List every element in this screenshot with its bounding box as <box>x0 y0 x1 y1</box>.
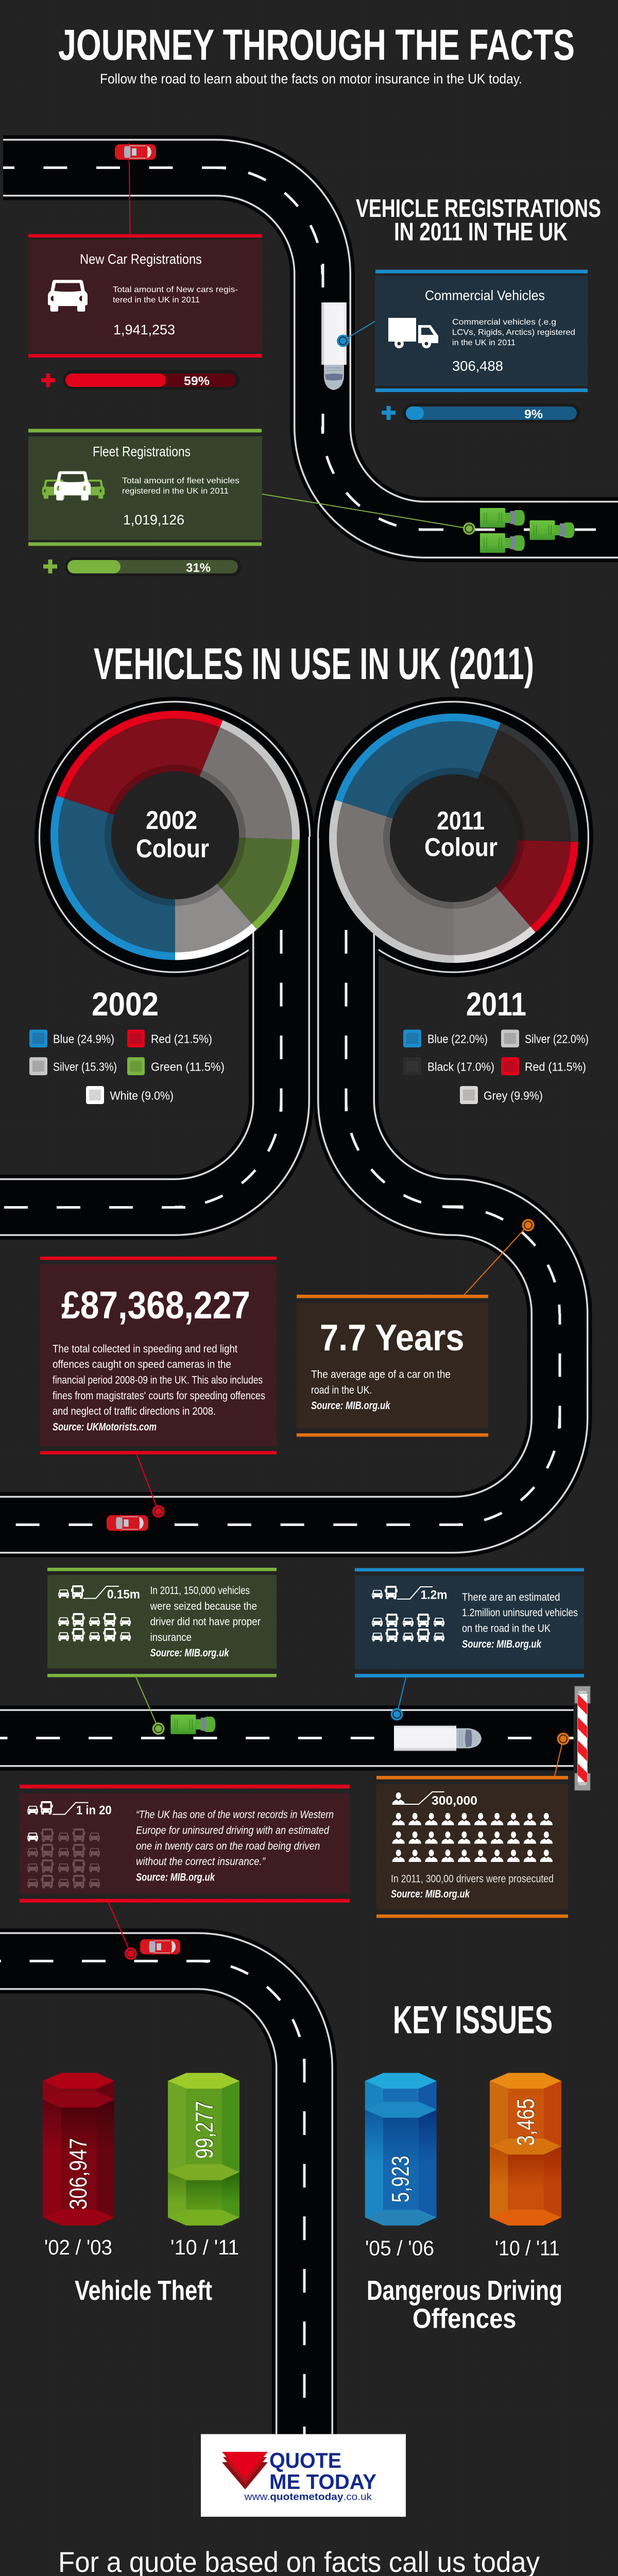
description: tered in the UK in 2011 <box>113 296 200 304</box>
icon: car <box>48 280 88 312</box>
label: 2011 colour: Colour <box>424 833 497 861</box>
subtitle: Follow the road to learn about the facts on motor insurance in the UK today. <box>100 71 522 87</box>
value: 99,277 <box>191 2101 218 2159</box>
source: Source: UKMotorists.com <box>53 1421 157 1433</box>
source: Source: MIB.org.uk <box>391 1888 470 1900</box>
marker: 7.7 years <box>522 1219 535 1231</box>
legend: 2002: Green (11.5%) <box>151 1060 225 1074</box>
icon: person header and value <box>392 1792 477 1808</box>
label: 2011 colour <box>424 806 497 861</box>
description: on the road in the UK <box>462 1623 551 1635</box>
quote <box>136 1809 334 1868</box>
value: 5,923 <box>387 2156 414 2202</box>
icon: white truck <box>394 1726 482 1751</box>
legend: 2002 <box>29 1029 225 1104</box>
quote: Europe for uninsured driving with an estimated <box>136 1825 330 1837</box>
road: circular discs <box>35 697 593 977</box>
marker: one in twenty <box>125 1947 137 1960</box>
description: road in the UK. <box>311 1384 372 1396</box>
description: financial period 2008-09 in the UK. This also includes <box>53 1374 263 1386</box>
source: Source: MIB.org.uk <box>311 1400 391 1412</box>
description: registered in the UK in 2011 <box>122 487 229 496</box>
icon: vehicle header and value <box>27 1801 112 1818</box>
heading: fleet registrations: Fleet Registrations <box>93 444 191 460</box>
pictogram: one in twenty vehicles <box>27 1828 100 1888</box>
logo text <box>244 2448 376 2503</box>
connector: new car registrations <box>129 161 130 234</box>
connector: drivers prosecuted <box>555 1739 563 1776</box>
heading: commercial vehicles: Commercial Vehicles <box>425 287 545 303</box>
heading: new car registrations: New Car Registrations <box>80 251 202 267</box>
connector: 7.7 years <box>465 1225 528 1295</box>
panel: uninsured vehicles <box>355 1568 584 1677</box>
progress bar: 59%: 59% <box>184 374 210 388</box>
panel: average car age <box>297 1295 488 1437</box>
logo: quote me today <box>201 2434 406 2517</box>
marker: commercial vehicles <box>337 335 349 347</box>
description: The total collected in speeding and red light <box>53 1343 237 1355</box>
connector: one in twenty <box>108 1903 131 1954</box>
pictogram: vehicles <box>58 1613 131 1641</box>
description: LCVs, Rigids, Arctics) registered <box>452 328 575 337</box>
description <box>53 1343 265 1417</box>
value: 1,941,253 <box>113 322 175 337</box>
progress bar: 31%: 31% <box>186 561 211 575</box>
icon: person header and value: 300,000 <box>432 1794 477 1808</box>
description <box>311 1369 451 1396</box>
legend: 2011 <box>403 1029 589 1104</box>
legend: 2002: Silver (15.3%) <box>53 1060 117 1074</box>
description: fines from magistrates' courts for speeding offences <box>53 1390 265 1402</box>
chart: 2011 colour donut <box>283 668 618 1009</box>
marker: speeding fines <box>152 1505 165 1518</box>
description: were seized because the <box>150 1600 257 1613</box>
value: 306,947 <box>64 2138 92 2210</box>
description <box>122 477 239 496</box>
heading: vehicle registrations <box>356 195 601 246</box>
description: and neglect of traffic directions in 2008. <box>53 1405 216 1417</box>
marker: uninsured vehicles <box>391 1708 403 1721</box>
road: left branch <box>0 837 281 1208</box>
marker: drivers prosecuted <box>557 1733 570 1745</box>
source: Source: MIB.org.uk <box>136 1871 215 1884</box>
icon: vehicle header and value: 1 in 20 <box>76 1804 112 1818</box>
value: 3,465 <box>512 2098 539 2146</box>
bar: dangerous driving 05/06 <box>365 2073 437 2226</box>
description: The average age of a car on the <box>311 1369 451 1381</box>
icon: vehicle header and value <box>372 1586 448 1602</box>
icon: white truck on road <box>321 302 347 390</box>
pictogram: people <box>392 1813 553 1862</box>
description: Total amount of New cars regis- <box>113 285 238 294</box>
description: 1.2million uninsured vehicles <box>462 1607 578 1619</box>
legend: 2002: Red (21.5%) <box>151 1032 212 1046</box>
quote: one in twenty cars on the road being driven <box>136 1840 320 1852</box>
label: 2002 colour: 2002 <box>146 806 197 835</box>
bar labels: years: '05 / '06 <box>365 2236 434 2260</box>
connector: commercial vehicles <box>343 320 376 341</box>
logo text: www.quotemetoday .co.uk <box>244 2492 372 2503</box>
bar: dangerous driving 10/11 <box>490 2073 561 2226</box>
icon: red car on road <box>115 143 156 161</box>
description: offences caught on speed cameras in the <box>53 1359 231 1370</box>
description <box>113 285 238 304</box>
progress bar: 31% <box>43 557 242 576</box>
quote: without the correct insurance.” <box>136 1856 266 1868</box>
description <box>150 1585 261 1643</box>
road: final section <box>0 1961 304 2434</box>
legend: 2002: White (9.0%) <box>110 1089 174 1103</box>
icon: vehicle header and value: 0.15m <box>107 1588 140 1601</box>
road: right branch <box>0 838 560 1525</box>
connector: vehicles seized <box>136 1677 159 1728</box>
description: There are an estimated <box>462 1591 560 1603</box>
heading: 2002: 2002 <box>92 986 159 1023</box>
marker: fleet registrations <box>463 522 475 535</box>
description <box>452 318 575 347</box>
icon: red car on lower road <box>107 1514 148 1532</box>
heading: vehicle theft: Vehicle Theft <box>75 2275 212 2306</box>
heading: dangerous driving offences: Offences <box>413 2303 516 2334</box>
icon: truck <box>388 318 438 348</box>
pictogram: vehicles <box>372 1614 444 1642</box>
progress bar: 59% <box>41 370 239 389</box>
chart: 2002 colour donut <box>5 665 346 1006</box>
panel: fleet registrations <box>28 429 262 546</box>
bar labels: years: '10 / '11 <box>495 2236 560 2260</box>
icon: green truck <box>170 1715 215 1734</box>
description: In 2011, 300,00 drivers were prosecuted <box>391 1873 554 1885</box>
heading: 2011: 2011 <box>466 986 526 1023</box>
bar labels: years <box>44 2235 560 2260</box>
source: Source: MIB.org.uk <box>150 1647 230 1659</box>
heading: dangerous driving offences <box>367 2275 562 2334</box>
label: 2011 colour: 2011 <box>437 806 485 835</box>
bar: vehicle theft 10/11 <box>168 2073 239 2226</box>
description: Total amount of fleet vehicles <box>122 477 239 485</box>
legend: 2011: Silver (22.0%) <box>525 1032 589 1046</box>
marker: vehicles seized <box>152 1722 165 1735</box>
bar labels: years: '10 / '11 <box>170 2235 239 2259</box>
icon: fleet of cars <box>42 471 105 500</box>
panel: one in twenty <box>20 1785 350 1903</box>
legend: 2002: Blue (24.9%) <box>53 1032 114 1046</box>
legend: 2011: Blue (22.0%) <box>427 1032 488 1046</box>
road: top section <box>3 168 618 530</box>
icon: vehicle header and value: 1.2m <box>421 1588 448 1602</box>
value: 1,019,126 <box>123 512 184 528</box>
heading: dangerous driving offences: Dangerous Driving <box>367 2275 562 2306</box>
icon: red triangle <box>222 2452 268 2489</box>
legend: 2011: Red (11.5%) <box>525 1060 586 1074</box>
bar labels: years: '02 / '03 <box>44 2235 112 2259</box>
progress bar: 9% <box>382 403 580 423</box>
description: driver did not have proper <box>150 1616 261 1628</box>
connector: fleet registrations <box>262 494 469 529</box>
panel: drivers prosecuted <box>376 1776 568 1918</box>
logo text: QUOTE <box>269 2448 341 2472</box>
panel: speeding fines <box>40 1257 277 1454</box>
source: Source: MIB.org.uk <box>462 1638 542 1650</box>
panel: new car registrations <box>28 234 262 358</box>
legend: 2011: Black (17.0%) <box>427 1060 494 1074</box>
description: Commercial vehicles (.e.g <box>452 318 556 327</box>
icon: vehicle header and value <box>58 1585 140 1601</box>
description: In 2011, 150,000 vehicles <box>150 1585 250 1597</box>
description: insurance <box>150 1632 192 1643</box>
heading: vehicle registrations: IN 2011 IN THE UK <box>394 218 568 246</box>
connector: speeding fines <box>137 1454 159 1512</box>
value: years: 7.7 Years <box>320 1317 465 1359</box>
connector: uninsured vehicles <box>397 1677 406 1715</box>
logo text: ME TODAY <box>269 2470 376 2494</box>
quote: “The UK has one of the worst records in Western <box>136 1809 334 1821</box>
icon: red car on final road <box>140 1938 180 1956</box>
panel: vehicles seized <box>47 1568 277 1677</box>
description <box>462 1591 578 1635</box>
progress bar: 9%: 9% <box>524 408 543 421</box>
legend: 2011: Grey (9.9%) <box>484 1089 543 1103</box>
label: 2002 colour <box>136 806 209 863</box>
value: 306,488 <box>452 359 503 374</box>
icon: green trucks <box>480 508 575 553</box>
description: in the UK in 2011 <box>452 338 516 347</box>
bar: vehicle theft 02/03 <box>43 2073 114 2226</box>
panel: commercial vehicles <box>375 270 588 392</box>
road: straight section <box>0 1737 574 1739</box>
label: 2002 colour: Colour <box>136 834 209 863</box>
value: amount: £87,368,227 <box>61 1283 250 1327</box>
icon: road barrier <box>575 1686 590 1790</box>
